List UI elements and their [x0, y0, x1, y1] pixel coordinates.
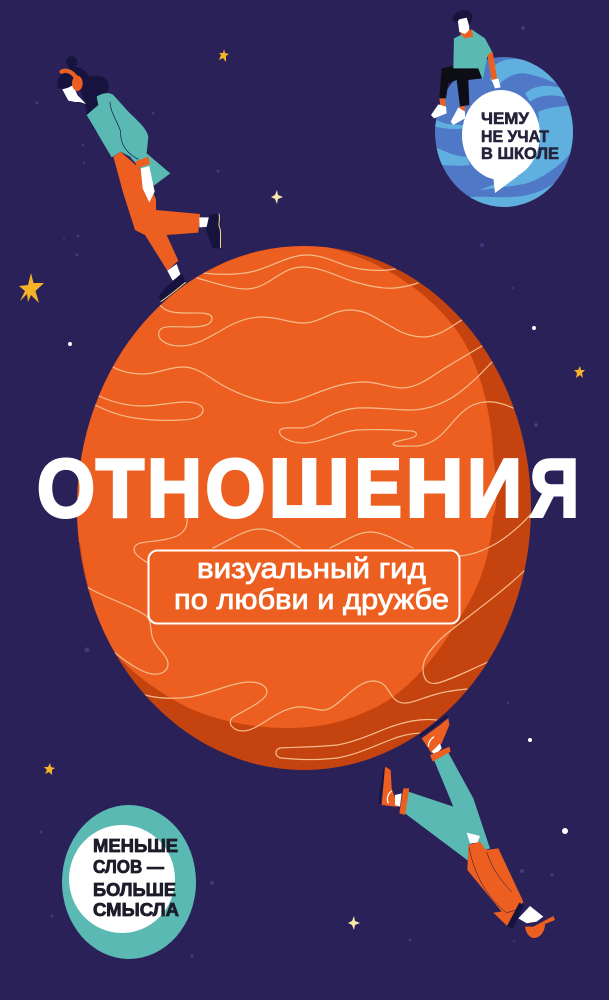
cuff [135, 157, 150, 168]
speech bubble [462, 90, 540, 193]
subtitle text: визуальный гид [197, 553, 426, 585]
badge: planet with text [433, 57, 573, 217]
title: Н [406, 442, 463, 534]
socks [199, 217, 210, 227]
character: woman in headphones [57, 56, 222, 302]
badge stripes [433, 59, 573, 217]
badge: less words more meaning [62, 805, 196, 959]
shirt [453, 29, 492, 80]
title: Ш [269, 442, 350, 534]
badge text [481, 110, 559, 163]
badge text: МЕНЬШЕ [93, 836, 178, 856]
title: Н [147, 442, 202, 534]
socks [432, 743, 442, 755]
socks [439, 98, 446, 107]
star: pale bottom [348, 916, 360, 930]
shoes [431, 104, 447, 118]
collar [507, 903, 524, 928]
star: pale near centre [271, 190, 283, 204]
badge text: НЕ УЧАТ [481, 128, 549, 146]
jacket [87, 93, 170, 186]
badge text: ЧЕМУ [481, 110, 530, 128]
title: Т [96, 442, 144, 534]
planet [77, 246, 531, 770]
title: О [205, 442, 265, 534]
subtitle box [148, 550, 460, 624]
character: man hanging under planet [379, 716, 555, 938]
title [37, 442, 579, 534]
shoes [422, 718, 449, 753]
hair [453, 10, 472, 25]
face [62, 85, 86, 104]
soles [420, 716, 447, 736]
trousers [405, 753, 490, 862]
title: О [37, 442, 95, 534]
arm and hand [487, 52, 497, 80]
hand [467, 833, 480, 843]
hand [141, 166, 155, 202]
title: Я [530, 442, 579, 534]
star: yellow lower left [44, 763, 55, 775]
headphones [62, 71, 83, 91]
subtitle text: по любви и дружбе [174, 584, 449, 616]
badge text: СЛОВ — [93, 857, 164, 877]
face [458, 17, 469, 34]
title: Е [354, 442, 402, 534]
shoe accents [387, 737, 434, 803]
badge text: В ШКОЛЕ [481, 145, 559, 163]
cap [525, 916, 555, 938]
badge text [93, 836, 179, 920]
face [518, 906, 543, 923]
jacket [467, 842, 523, 927]
star: yellow right [574, 366, 585, 378]
cuffs [430, 747, 451, 762]
character: boy sitting on badge [431, 10, 501, 125]
shoes [206, 213, 222, 248]
title: И [467, 442, 522, 534]
hair [57, 56, 113, 137]
star: large yellow [19, 273, 44, 303]
trousers [113, 152, 200, 271]
white circle [69, 825, 175, 933]
badge text: СМЫСЛА [93, 900, 179, 920]
badge text: БОЛЬШЕ [93, 880, 176, 900]
collar [460, 29, 473, 38]
trousers [439, 66, 483, 107]
star: small yellow top [219, 49, 229, 62]
subtitle text [174, 553, 449, 616]
planet surface lines [87, 255, 532, 760]
